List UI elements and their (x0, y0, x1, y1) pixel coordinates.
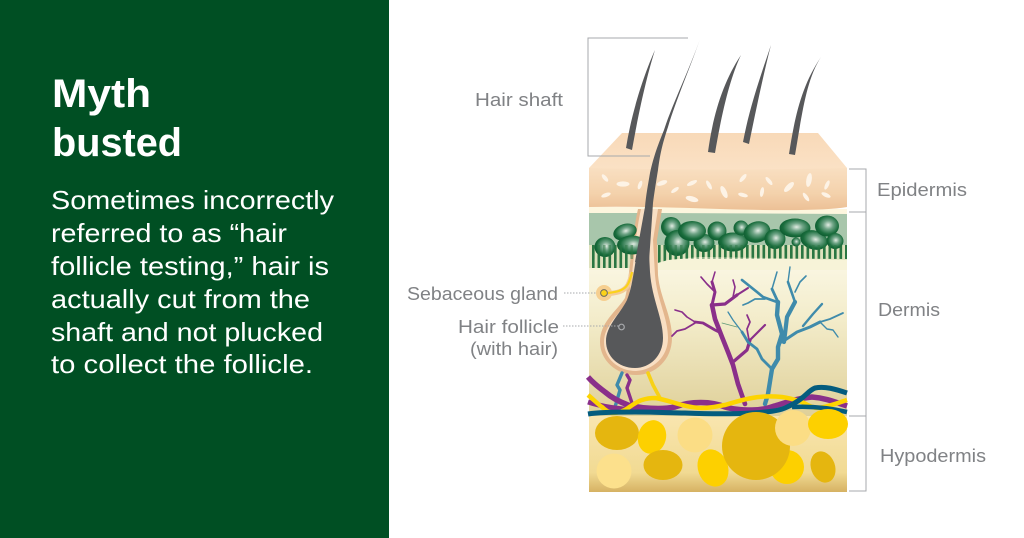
epidermis layer (589, 168, 847, 210)
bracket: hair shaft (588, 38, 688, 156)
labels: Hair follicle (458, 317, 559, 337)
bracket: epidermis (849, 169, 866, 212)
text block: explanation: Sometimes incorrectly (51, 185, 334, 215)
sebaceous gland (596, 272, 632, 301)
labels: Epidermis (877, 180, 967, 200)
leader: hair follicle (563, 325, 619, 327)
labels: Sebaceous gland (407, 284, 558, 304)
blue blood vessel tree (722, 267, 843, 404)
text block: explanation: actually cut from the (51, 284, 310, 314)
bracket: hypodermis (849, 416, 866, 491)
text block: explanation (51, 185, 334, 379)
text block: explanation: shaft and not plucked (51, 317, 323, 347)
vessel bundle: yellow (588, 395, 847, 413)
hair bulb (606, 253, 663, 368)
text block: explanation: follicle testing,” hair is (51, 251, 329, 281)
hair shafts (626, 39, 821, 262)
vessel bundle: purple (588, 377, 847, 410)
labels: Hypodermis (880, 446, 986, 466)
small circle marker on hair (619, 324, 624, 330)
purple blood vessel tree (672, 272, 765, 404)
green glands (594, 216, 844, 257)
vessel bundle: teal (588, 387, 847, 414)
labels (407, 90, 986, 466)
panel: myth busted sidebar (0, 0, 389, 538)
fat cells (595, 409, 848, 491)
heading: busted (52, 121, 182, 165)
chart: skin cross-section diagram (588, 39, 848, 492)
heading: Myth (52, 72, 151, 116)
white junction band (589, 207, 847, 214)
hair follicle (596, 209, 672, 375)
heading (52, 72, 182, 165)
labels: (with hair) (470, 339, 558, 359)
epidermis cells (601, 173, 831, 203)
bracket: dermis (849, 212, 866, 416)
text block: explanation: referred to as “hair (51, 218, 287, 248)
dermis layer (589, 256, 847, 416)
labels: Dermis (878, 300, 940, 320)
labels: Hair shaft (475, 90, 563, 110)
papillary green band (589, 212, 847, 270)
text block: explanation: to collect the follicle. (51, 349, 313, 379)
hypodermis layer (589, 414, 847, 492)
small vessels below follicle (615, 373, 660, 407)
leader: sebaceous gland (564, 292, 596, 294)
stripes over glands (592, 245, 847, 259)
skin surface (589, 133, 847, 172)
